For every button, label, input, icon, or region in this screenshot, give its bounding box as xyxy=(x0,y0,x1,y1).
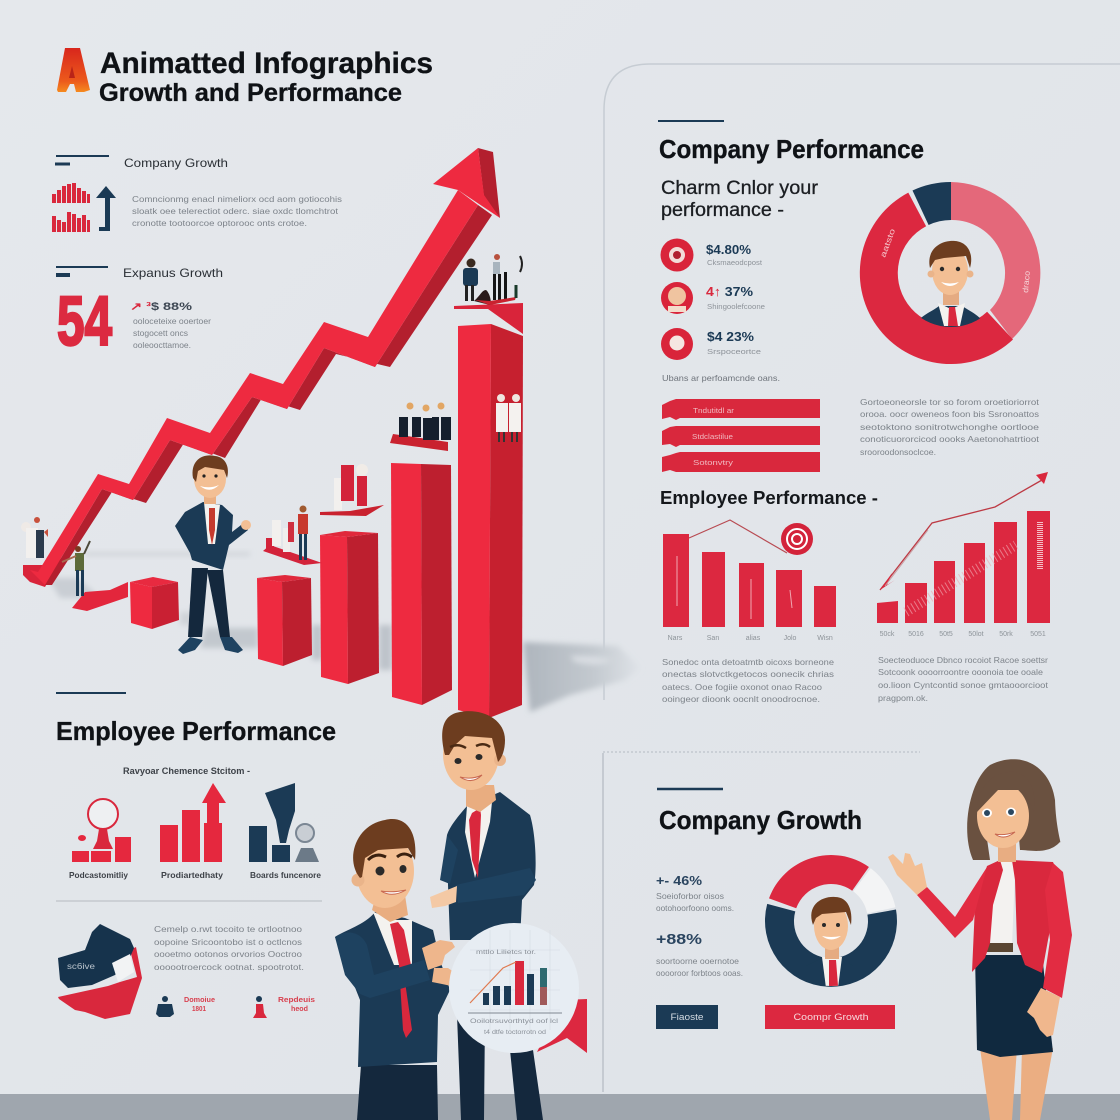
stat: 37 xyxy=(661,282,765,314)
small people on top platform xyxy=(463,254,522,305)
panel: employee performance xyxy=(56,693,336,1019)
panel: company growth xyxy=(656,789,897,1029)
right bar chart: 5051 xyxy=(1030,631,1046,638)
stat 2: +88% xyxy=(656,931,702,948)
stat 1 xyxy=(656,873,734,913)
right bar chart: 50t5 xyxy=(939,631,953,638)
button: navy: Fiaoste xyxy=(670,1012,704,1022)
red ribbon and cube xyxy=(72,577,179,629)
character: tall man xyxy=(430,711,543,1120)
donut chart with avatar: aatsto xyxy=(878,227,897,259)
text block right xyxy=(878,655,1049,703)
subheading: performance - xyxy=(661,200,784,221)
text block xyxy=(860,397,1040,457)
icon: bars with arrow xyxy=(160,783,226,862)
stat 2: soortoorne ooernotoe xyxy=(656,956,739,966)
avatar xyxy=(811,896,852,986)
text block left xyxy=(662,657,834,704)
icon and label: person red: Repdeuis xyxy=(278,997,315,1004)
text block left: oatecs. Ooe fogiie oxonot onao Racoo xyxy=(662,682,822,692)
text block: stogocett oncs xyxy=(133,328,188,338)
stat: 23: Srspoceortce xyxy=(707,349,761,356)
stat: 37: Shingoolefcoone xyxy=(707,304,765,311)
text block: ooloceteixe ooertoer xyxy=(133,316,211,326)
subheading: Ravyoar Chemence Stcitom - xyxy=(123,766,250,776)
text block right: oo.lioon Cyntcontid sonoe gmtaooorcioot xyxy=(878,680,1049,690)
text block: cronotte tootoorcoe optorooc onts crotoe. xyxy=(132,218,307,228)
heading: Company Growth xyxy=(659,805,862,835)
panel: company performance xyxy=(658,121,1040,472)
right bar chart: 50rk xyxy=(999,631,1013,638)
icon and label: person red xyxy=(253,996,315,1018)
heading: Employee Performance - xyxy=(660,488,878,508)
heading: expanus growth: Expanus Growth xyxy=(123,266,223,280)
stat: 37: 4↑ 37% xyxy=(706,284,753,299)
character: short man xyxy=(335,819,458,1120)
icon: folded card: sc6ive xyxy=(67,962,96,971)
text block: seotoktono sonitrotwchonghe oortlooe xyxy=(860,422,1039,432)
text block left: Sonedoc onta detoatmtb oicoxs borneone xyxy=(662,657,834,667)
ribbon list: Tndutitdl ar xyxy=(693,406,735,415)
icon and label: person red: heod xyxy=(291,1006,308,1013)
right bar chart: 50ck xyxy=(880,631,895,638)
stat 1: Soeioforbor oisos xyxy=(656,891,724,901)
left bar chart xyxy=(663,520,836,642)
left bar chart: Jolo xyxy=(784,635,797,642)
subheading xyxy=(661,178,819,221)
callout: chart bubble: mttlo Lilietcs tor. xyxy=(476,950,536,956)
ribbon list: Stdclastilue xyxy=(692,432,733,441)
title: Animatted Infographics xyxy=(100,47,433,80)
stat: 4.80 xyxy=(660,238,762,272)
panel: employee performance charts xyxy=(660,472,1050,704)
donut chart with avatar xyxy=(765,855,897,988)
small people platform 1 xyxy=(263,506,322,565)
left bar chart: Nars xyxy=(668,635,683,642)
heading: company growth: Company Growth xyxy=(124,156,228,170)
button: red: Coompr Growth xyxy=(794,1012,868,1022)
text block xyxy=(133,316,211,350)
text block right: pragpom.ok. xyxy=(878,693,928,703)
title: Growth and Performance xyxy=(99,79,402,107)
text block: Cemelp o.rwt tocoito te ortlootnoo xyxy=(154,924,302,934)
title xyxy=(99,47,433,107)
text block: srooroodonsoclcoe. xyxy=(860,447,936,457)
character: woman presenter xyxy=(888,759,1072,1120)
text block: oooetmo ootonos orvorios Ooctroo xyxy=(154,949,302,959)
stat: 23 xyxy=(661,328,761,360)
bar 2 xyxy=(320,531,379,684)
icon labels xyxy=(69,870,321,880)
icon and label: person navy: Domoiue xyxy=(184,997,215,1004)
subheading: Charm Cnlor your xyxy=(661,178,819,199)
button: red xyxy=(765,1005,895,1029)
growth arrow xyxy=(23,148,500,587)
right bar chart: 50lot xyxy=(968,631,984,638)
left bar chart: San xyxy=(707,635,719,642)
small people on left tip xyxy=(21,517,48,558)
bar 3 xyxy=(391,463,452,705)
text block: Comncionmg enacl nimeliorx ocd aom gotiocohis xyxy=(132,194,342,204)
character: standing man xyxy=(175,455,251,654)
text block right: Soecteoduoce Dbnco rocoiot Racoe soettsr xyxy=(878,655,1048,665)
text block: ooleoocttamoe. xyxy=(133,340,191,350)
right bar chart: 5016 xyxy=(908,631,924,638)
icon: folded card xyxy=(58,924,142,1019)
callout: chart bubble xyxy=(449,923,587,1053)
stat 2: ooooroor forbtoos ooas. xyxy=(656,968,743,978)
icon labels: Boards funcenore xyxy=(250,870,321,880)
bar 1 xyxy=(257,575,312,666)
heading: Employee Performance xyxy=(56,716,336,746)
small people on bar 4 side xyxy=(496,394,521,442)
icon labels: Prodiartedhaty xyxy=(161,870,223,880)
right bar chart xyxy=(877,472,1050,638)
panel: expanus growth xyxy=(56,266,223,360)
bar 4 xyxy=(454,303,523,718)
avatar xyxy=(921,240,980,327)
stat: 4.80: $4.80% xyxy=(706,242,751,257)
stat: ↗ ³ $ 88% xyxy=(130,301,192,313)
text block: conoticuororcicod oooks Aaetonohatrtioot xyxy=(860,434,1040,444)
icon: mini bars and up arrow xyxy=(52,183,116,232)
text block right: Sotcoonk oooorroontre ooonoia toe ooale xyxy=(878,667,1043,677)
icon: gauge xyxy=(72,799,131,862)
small people platform 2 xyxy=(320,464,384,516)
floor shadows xyxy=(48,552,640,712)
left bar chart: alias xyxy=(746,635,761,642)
button: navy xyxy=(656,1005,718,1029)
callout: chart bubble: Ooilotrsuvorthtyd oof lcl xyxy=(470,1018,559,1025)
logo: letter A xyxy=(57,48,90,92)
donut chart with avatar xyxy=(860,182,1040,364)
small people platform 3 xyxy=(390,402,451,451)
text block: orooa. oocr oweneos foon bis Ssronoattos xyxy=(860,409,1039,419)
callout: chart bubble: t4 dtfe toctorrotn od xyxy=(484,1029,546,1036)
ribbon list: Sotonvtry xyxy=(693,458,733,467)
stat: 4.80: Cksmaeodcpost xyxy=(707,260,762,267)
stat 1: ootohoorfoono ooms. xyxy=(656,903,734,913)
icon labels: Podcastomitliy xyxy=(69,870,128,880)
text block: oooootroercock ootnat. spootrotot. xyxy=(154,962,304,972)
icon and label: person navy: 1801 xyxy=(192,1006,206,1013)
big number: 54 xyxy=(57,282,112,360)
panel: company growth summary xyxy=(52,156,342,232)
text block left: onectas slotvctkgetocos oonecik chrias xyxy=(662,669,834,679)
left bar chart: Wisn xyxy=(817,635,833,642)
caption: Ubans ar perfoamcnde oans. xyxy=(662,373,780,383)
stat 2 xyxy=(656,931,743,978)
text block xyxy=(154,924,304,972)
ribbon list xyxy=(662,399,820,472)
stat 1: +- 46% xyxy=(656,873,702,888)
text block: Gortoeoneorsle tor so forom oroetioriorrot xyxy=(860,397,1040,407)
text block: oopoine Sricoontobo ist o octlcnos xyxy=(154,937,302,947)
donut chart with avatar: draco xyxy=(1021,270,1032,293)
icon and label: person navy xyxy=(156,996,215,1017)
heading: Company Performance xyxy=(659,134,924,164)
text block xyxy=(132,194,342,228)
icon: navy objects xyxy=(249,783,319,862)
text block left: ooingeor dioonk oocnlt onoodrocnoe. xyxy=(662,694,820,704)
text block: sloatk oee telerectiot oderc. siae oxdc tlomchtrot xyxy=(132,206,339,216)
small person with raised arm xyxy=(62,541,90,596)
stat: 23: $4 23% xyxy=(707,329,754,344)
